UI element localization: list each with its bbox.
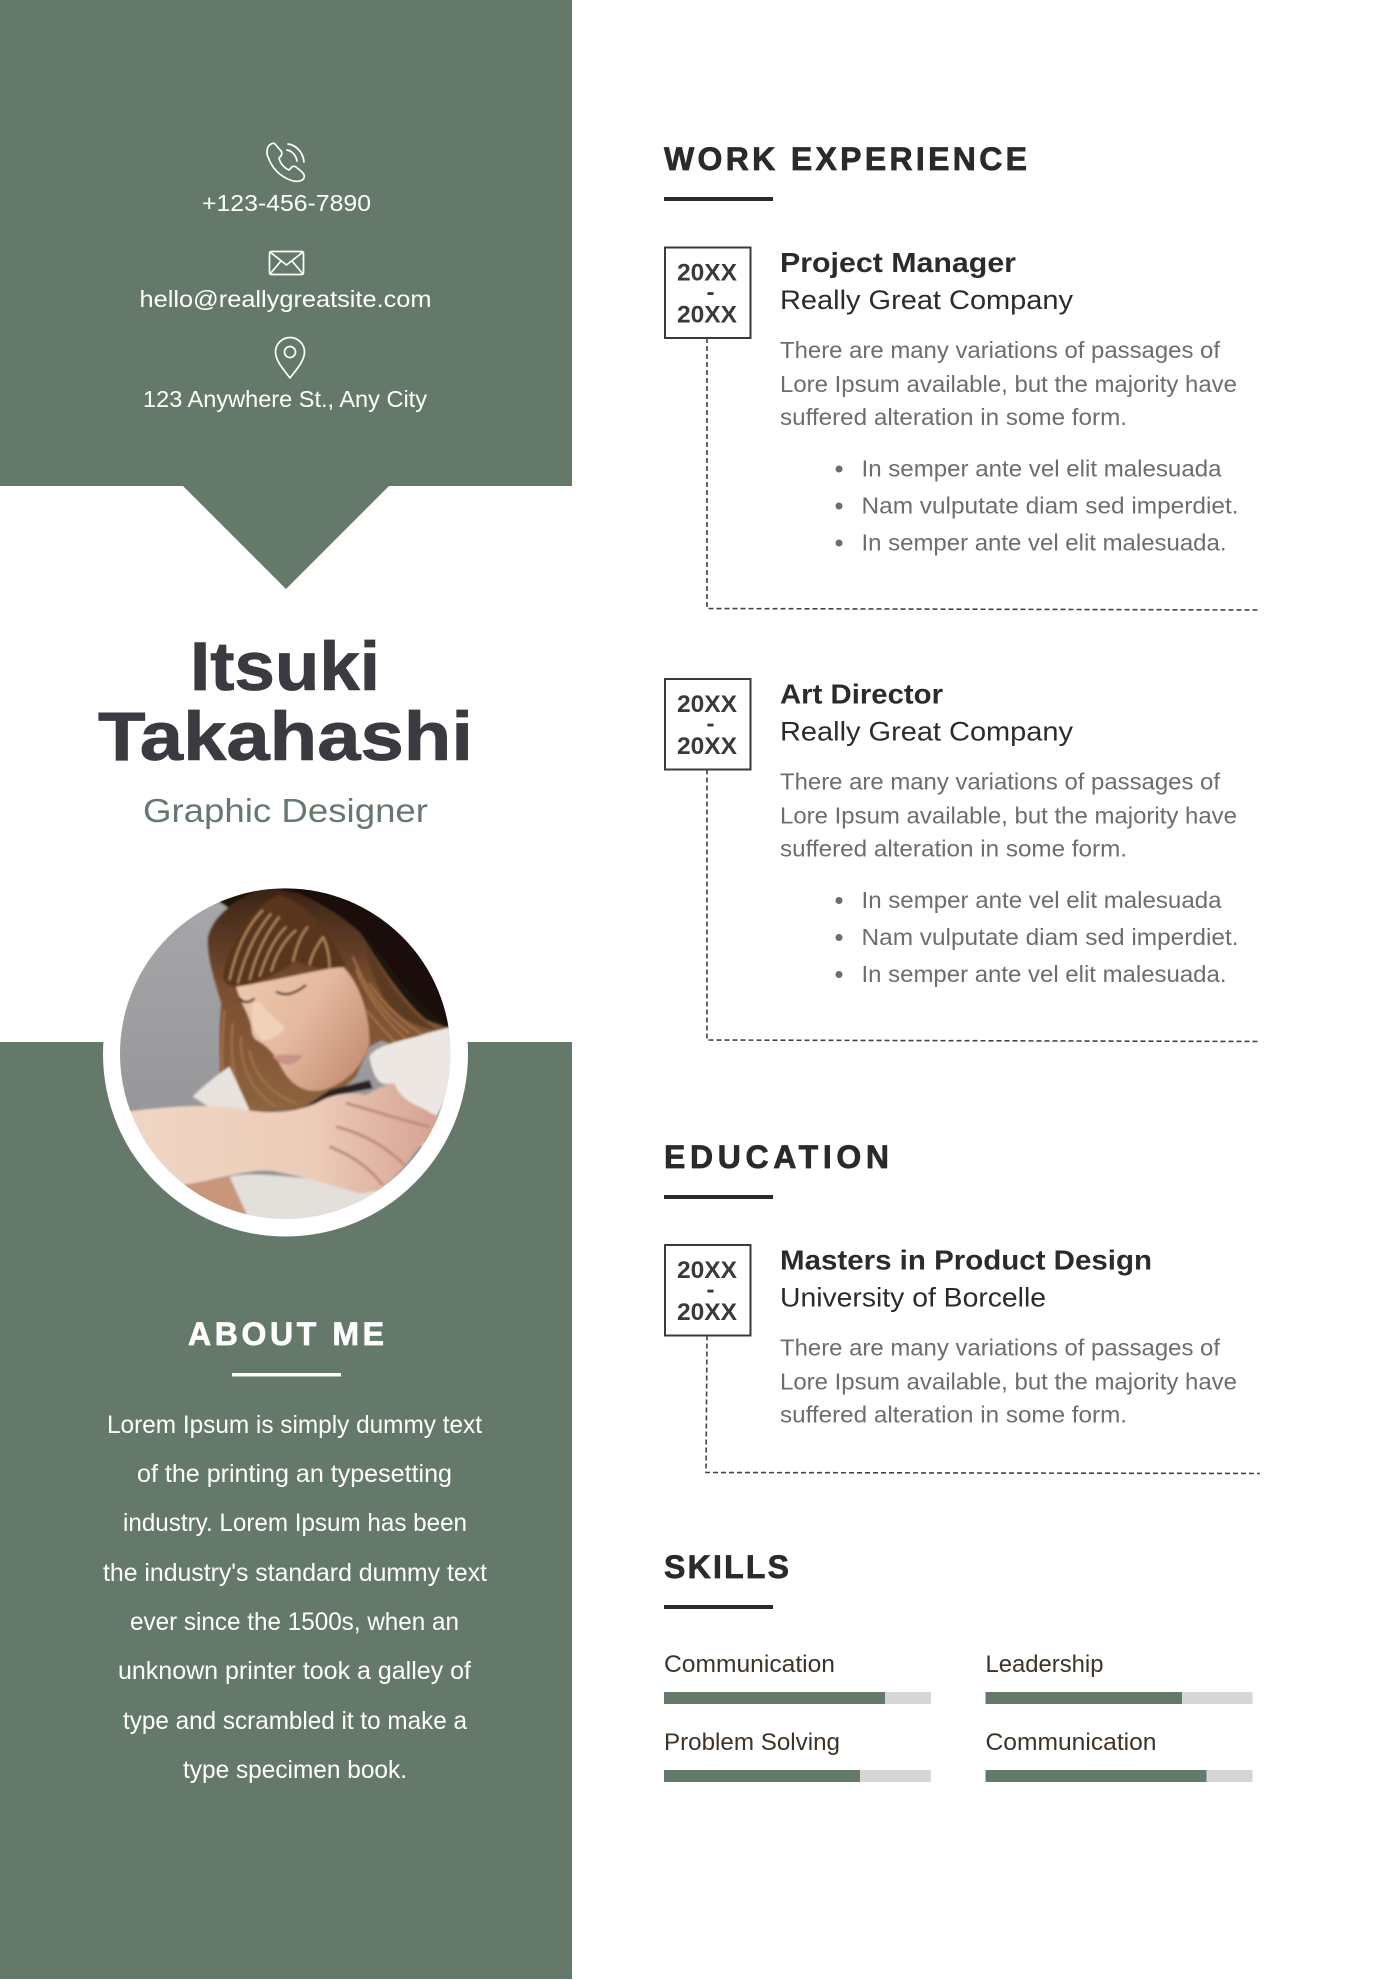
street address: 123 Anywhere St., Any City xyxy=(143,386,428,412)
name heading: Takahashi xyxy=(98,698,473,775)
panel: about xyxy=(0,1042,572,1979)
about paragraph: type specimen book. xyxy=(183,1756,407,1784)
bullet list: In semper ante vel elit malesuada xyxy=(862,887,1222,913)
skill: leadership: Leadership xyxy=(986,1651,1104,1678)
description xyxy=(780,337,1237,430)
bullet list xyxy=(836,456,1238,556)
description: suffered alteration in some form. xyxy=(780,836,1127,862)
bullet list: In semper ante vel elit malesuada xyxy=(862,456,1222,482)
skill: communication xyxy=(664,1651,931,1704)
description: There are many variations of passages of xyxy=(780,337,1221,363)
date box xyxy=(665,1245,750,1336)
icon: location pin xyxy=(276,338,304,378)
date box: - xyxy=(706,710,714,738)
about paragraph: Lorem Ipsum is simply dummy text xyxy=(107,1411,482,1439)
section: work experience xyxy=(664,141,1260,1042)
skill: problem solving xyxy=(664,1729,931,1782)
skill: communication: Communication xyxy=(664,1651,835,1678)
panel: contact xyxy=(0,0,572,589)
about paragraph: ever since the 1500s, when an xyxy=(130,1608,459,1636)
skills heading: SKILLS xyxy=(664,1549,789,1585)
bullet list xyxy=(836,887,1238,987)
skill: communication second: Communication xyxy=(986,1729,1156,1756)
skill: leadership xyxy=(986,1651,1252,1704)
bullet list: In semper ante vel elit malesuada. xyxy=(862,961,1226,987)
date box: - xyxy=(706,1276,714,1304)
name heading xyxy=(98,628,473,775)
date box xyxy=(665,679,750,770)
about paragraph: industry. Lorem Ipsum has been xyxy=(123,1509,467,1537)
company: Really Great Company xyxy=(780,716,1074,746)
heading rule xyxy=(664,1195,773,1199)
date box: 20XX xyxy=(677,1257,737,1284)
description xyxy=(780,768,1237,862)
portrait ring xyxy=(103,872,468,1236)
university: University of Borcelle xyxy=(780,1282,1046,1312)
date box xyxy=(665,248,750,338)
entry: project manager xyxy=(665,247,1260,610)
icon: envelope xyxy=(270,252,304,274)
entry: art director xyxy=(665,678,1260,1042)
description: Lore Ipsum available, but the majority have xyxy=(780,802,1237,828)
section: skills xyxy=(664,1549,1252,1782)
role title: Project Manager xyxy=(780,247,1016,278)
about paragraph xyxy=(103,1411,487,1784)
description: There are many variations of passages of xyxy=(780,1334,1221,1360)
skill: problem solving: Problem Solving xyxy=(664,1729,840,1756)
education heading: EDUCATION xyxy=(664,1139,889,1175)
section: education xyxy=(664,1139,1260,1474)
description: Lore Ipsum available, but the majority have xyxy=(780,371,1237,397)
description: There are many variations of passages of xyxy=(780,768,1221,794)
bullet list: Nam vulputate diam sed imperdiet. xyxy=(862,924,1238,950)
name heading: Itsuki xyxy=(190,628,380,705)
portrait photo xyxy=(120,888,451,1219)
about heading: ABOUT ME xyxy=(188,1316,384,1352)
degree title: Masters in Product Design xyxy=(780,1244,1152,1276)
job title: Graphic Designer xyxy=(143,792,428,829)
date box: 20XX xyxy=(677,691,737,718)
heading rule xyxy=(664,1605,773,1609)
about rule xyxy=(232,1373,341,1376)
description: suffered alteration in some form. xyxy=(780,1402,1127,1428)
email address: hello@reallygreatsite.com xyxy=(140,286,432,312)
heading rule xyxy=(664,197,773,201)
description: Lore Ipsum available, but the majority have xyxy=(780,1368,1237,1394)
pointer triangle xyxy=(182,485,390,589)
about paragraph: of the printing an typesetting xyxy=(137,1460,452,1488)
about paragraph: unknown printer took a galley of xyxy=(118,1657,471,1685)
timeline connector xyxy=(707,770,1260,1042)
work experience heading: WORK EXPERIENCE xyxy=(664,141,1027,177)
about paragraph: type and scrambled it to make a xyxy=(123,1707,467,1735)
skill: communication second xyxy=(986,1729,1252,1782)
role title: Art Director xyxy=(780,678,943,710)
entry: masters xyxy=(665,1244,1260,1474)
date box: 20XX xyxy=(677,1299,737,1326)
date box: 20XX xyxy=(677,733,737,760)
timeline connector xyxy=(706,1336,1260,1474)
date box: 20XX xyxy=(677,260,737,286)
about paragraph: the industry's standard dummy text xyxy=(103,1559,487,1587)
bullet list: Nam vulputate diam sed imperdiet. xyxy=(862,492,1238,518)
icon: phone xyxy=(267,143,304,181)
date box: 20XX xyxy=(677,302,737,328)
company: Really Great Company xyxy=(780,285,1074,315)
description xyxy=(780,1334,1237,1428)
description: suffered alteration in some form. xyxy=(780,404,1127,430)
date box: - xyxy=(706,279,714,306)
phone number: +123-456-7890 xyxy=(202,190,371,216)
timeline connector xyxy=(707,338,1260,610)
bullet list: In semper ante vel elit malesuada. xyxy=(862,530,1226,556)
